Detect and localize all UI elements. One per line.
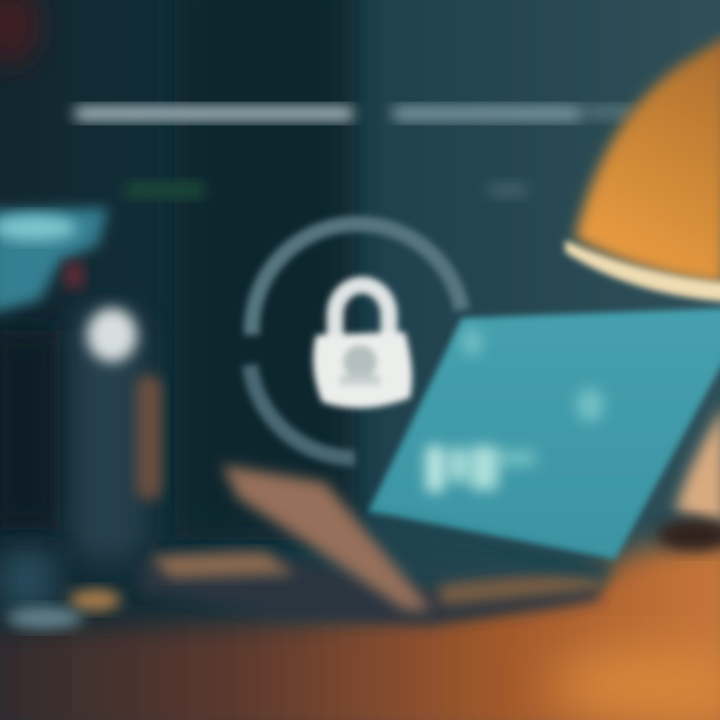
- lamp post: [675, 405, 720, 525]
- wooden stand: [222, 465, 432, 610]
- left device: bright screen: [0, 208, 108, 530]
- laptop base: [140, 548, 610, 625]
- lamp shade: [565, 35, 720, 302]
- red glow top left: [0, 0, 40, 65]
- laptop screen: [368, 308, 720, 580]
- title bar (illegible blurred text): [74, 106, 635, 121]
- lamp base shadow: [657, 519, 720, 551]
- left device: bottle / tower with small lock: [64, 262, 162, 560]
- screen text smudge: [426, 446, 536, 492]
- lower-left table items: [0, 550, 121, 629]
- desk surface: [0, 535, 720, 720]
- screen glyph smudges: [462, 328, 604, 422]
- lock ring: [250, 224, 462, 458]
- dark vertical panel: [175, 0, 355, 540]
- small sub-label smudges: [125, 182, 528, 198]
- padlock icon: [313, 285, 412, 408]
